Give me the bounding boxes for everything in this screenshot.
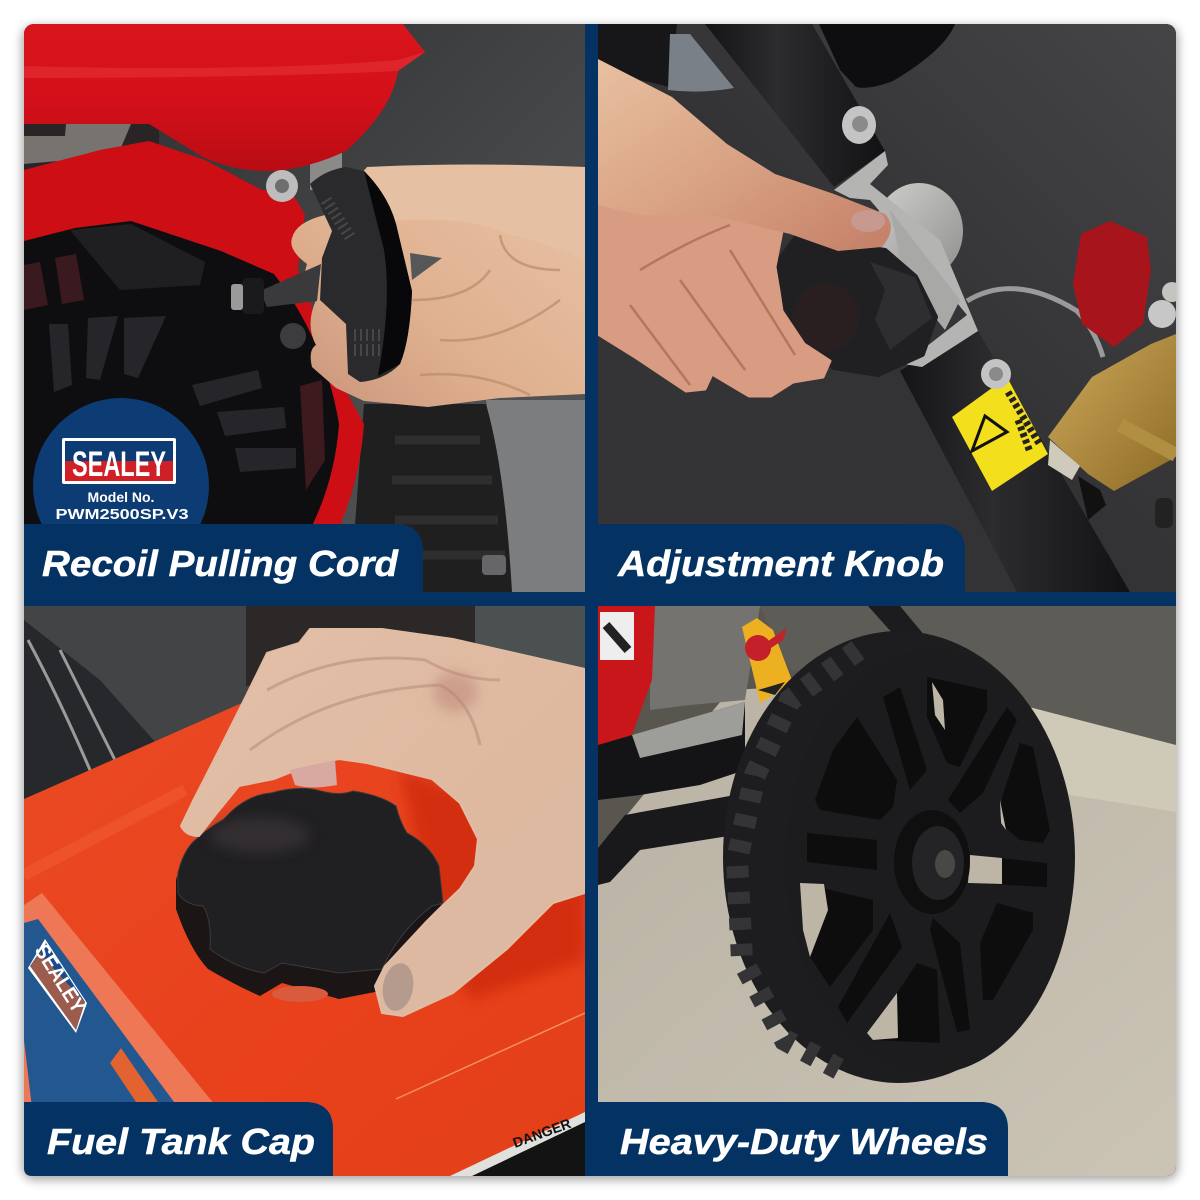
hub xyxy=(894,810,970,914)
silver hinge joint xyxy=(834,151,978,367)
finger creases xyxy=(630,225,795,385)
panel: recoil pulling cord photo xyxy=(24,24,585,592)
label tab: heavy-duty wheels: Heavy-Duty Wheels xyxy=(620,1121,988,1162)
rear tube xyxy=(868,606,925,636)
tank rim shadow xyxy=(24,790,185,875)
coiled hose xyxy=(819,24,955,88)
yellow oil tag xyxy=(742,618,793,703)
dark background xyxy=(24,606,585,1176)
red engine side xyxy=(598,606,655,745)
brass pump xyxy=(1048,282,1182,528)
yellow warning sticker xyxy=(952,377,1048,491)
lower frame tube xyxy=(900,324,1130,592)
T handle xyxy=(310,167,412,382)
floor through rim xyxy=(800,682,1006,1040)
grey container xyxy=(668,34,734,92)
label tab: fuel tank cap xyxy=(24,1102,333,1176)
label tab: adjustment knob xyxy=(585,524,965,604)
red pump knob xyxy=(1073,221,1151,347)
black adjustment knob xyxy=(775,237,935,374)
red filler neck xyxy=(272,986,328,1002)
knob facet xyxy=(870,262,932,350)
thumb nail xyxy=(851,210,885,232)
model number text: Model No. xyxy=(88,489,154,505)
red engine body xyxy=(24,141,364,530)
recoil cover vents xyxy=(24,224,325,490)
background wall xyxy=(24,24,585,524)
panel: heavy-duty wheels photo xyxy=(598,606,1176,1176)
upper grey floor xyxy=(760,606,1176,745)
silver bracket behind tank xyxy=(310,150,342,190)
rim openings xyxy=(800,677,1050,1043)
silver engine detail xyxy=(24,124,131,164)
red fuel tank xyxy=(24,24,425,171)
sticker bolt xyxy=(981,359,1011,389)
engine mount xyxy=(598,702,745,800)
machine detail at left xyxy=(24,620,180,800)
hand xyxy=(291,166,585,407)
rim xyxy=(786,650,1074,1074)
gap between thumb and fingers xyxy=(410,253,442,280)
tread pattern xyxy=(737,650,858,1075)
axle xyxy=(935,850,955,878)
concrete floor xyxy=(598,680,1176,1176)
pale step xyxy=(925,680,1176,812)
cap side band xyxy=(176,873,445,999)
cord stem xyxy=(231,264,321,349)
label tab: recoil pulling cord: Recoil Pulling Cord xyxy=(42,543,399,584)
warning sticker xyxy=(600,612,634,660)
grey floor xyxy=(486,400,585,592)
knuckle redness xyxy=(433,672,477,712)
tyre xyxy=(350,404,512,592)
blue tank sticker: SEALEY xyxy=(30,940,90,1017)
panel: fuel tank cap photo xyxy=(24,606,585,1176)
black fuel cap xyxy=(178,788,443,973)
grey background xyxy=(598,606,1176,1176)
frame tubes xyxy=(598,795,735,885)
label tab: heavy-duty wheels xyxy=(585,1102,1008,1176)
model number text xyxy=(56,492,188,519)
metal pipe loop xyxy=(967,289,1103,357)
knuckle shading xyxy=(250,658,500,750)
Sealey logo: SEALEY xyxy=(72,445,166,484)
upper bolt xyxy=(842,106,876,144)
grey wall right xyxy=(475,606,585,676)
hand palm and fingers xyxy=(598,190,830,396)
thumb xyxy=(598,59,891,251)
finger beneath xyxy=(290,760,337,788)
machine highlights xyxy=(28,640,115,770)
thumb nail xyxy=(379,961,417,1013)
label tab: adjustment knob: Adjustment Knob xyxy=(617,543,944,584)
navy model badge xyxy=(33,398,209,524)
model number text: PWM2500SP.V3 xyxy=(56,506,188,523)
tank rim band xyxy=(24,52,425,78)
red shadow by hand xyxy=(400,770,585,1000)
highlight line xyxy=(396,1013,585,1099)
knob end face xyxy=(793,283,859,351)
hub cap xyxy=(912,826,964,900)
tyre xyxy=(723,631,1075,1083)
hand xyxy=(181,629,585,1016)
hand creases xyxy=(412,235,560,395)
silver engine xyxy=(650,606,760,710)
label tab: recoil pulling cord xyxy=(24,524,423,604)
panel: adjustment knob photo xyxy=(598,24,1182,592)
black recoil cover xyxy=(24,221,339,530)
dark gap under tank xyxy=(24,124,159,172)
background xyxy=(598,24,1176,592)
wheel xyxy=(723,631,1075,1083)
danger sticker: DANGER xyxy=(511,1115,573,1151)
thumb xyxy=(367,164,584,222)
upper frame tube xyxy=(705,24,885,187)
label tab: fuel tank cap: Fuel Tank Cap xyxy=(47,1121,315,1162)
Sealey logo xyxy=(62,438,176,484)
blue tank sticker xyxy=(24,893,215,1176)
cap sheen xyxy=(210,817,310,853)
top left ridged equipment xyxy=(598,24,677,87)
orange tank xyxy=(24,680,585,1176)
engine bolt xyxy=(266,170,298,202)
danger sticker xyxy=(450,1112,585,1176)
dark wall xyxy=(246,606,475,686)
